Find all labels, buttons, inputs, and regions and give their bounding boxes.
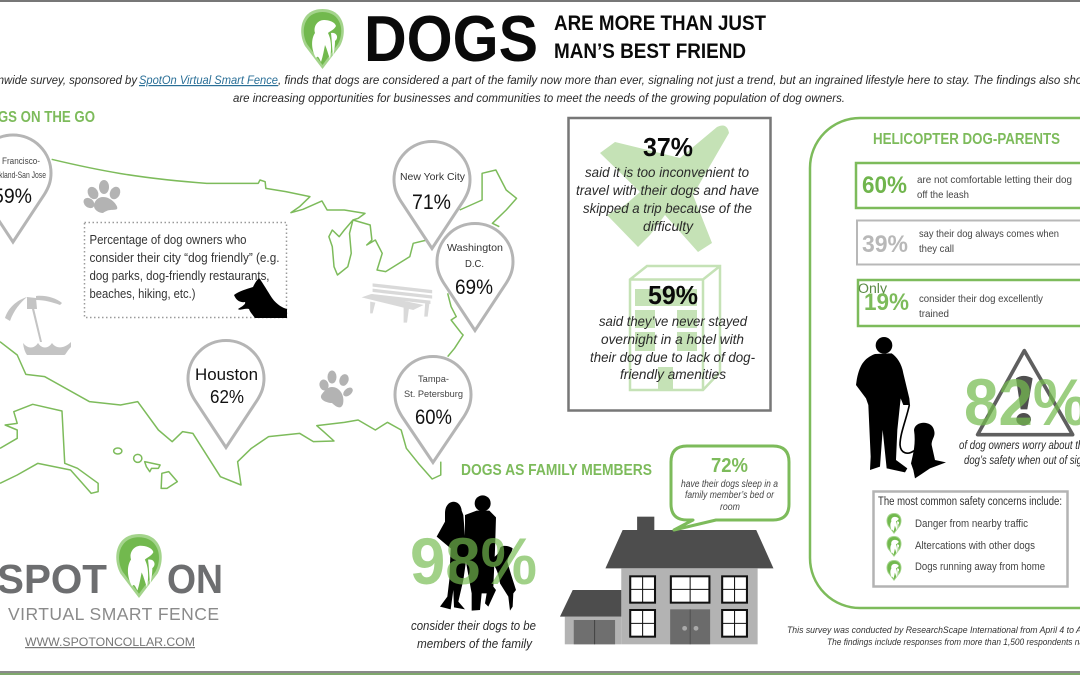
stat box: only 19 percent: 19% <box>864 289 909 316</box>
stat box: only 19 percent: consider their dog excellently <box>919 293 1044 305</box>
callout: percentage of dog owners: beaches, hiking, etc.) <box>90 287 196 301</box>
stat box: 60 percent: off the leash <box>917 189 969 201</box>
icon: warning triangle <box>978 351 1073 435</box>
panel: travel stats: said they’ve never stayed <box>599 313 748 329</box>
US map outline <box>0 159 517 493</box>
pin: Houston: Houston <box>195 366 258 384</box>
subtitle: ARE MORE THAN JUST <box>554 12 766 35</box>
stat box: 60 percent: 60% <box>862 172 907 199</box>
stat box: 60 percent <box>856 163 1080 208</box>
pin: New York City: 71% <box>412 191 451 214</box>
pin: Washington D.C.: 69% <box>455 276 493 299</box>
box: safety concerns: Danger from nearby traffic <box>915 518 1028 530</box>
pin: Houston <box>188 340 264 448</box>
footnote <box>787 625 1080 648</box>
stat box: only 19 percent: Only <box>858 281 887 296</box>
logo: SpotOn virtual smart fence: SPOT <box>0 556 107 602</box>
pin: Tampa-St. Petersburg <box>395 356 471 462</box>
stat: 98 percent with family silhouette: consider their dogs to be <box>411 619 536 633</box>
box: safety concerns: Altercations with other dogs <box>915 540 1035 552</box>
illustration: house <box>560 517 773 644</box>
bottom rule <box>0 671 1080 675</box>
heading: dogs as family members: DOGS AS FAMILY MEMBERS <box>461 462 652 479</box>
stat box: only 19 percent <box>858 280 1080 326</box>
panel: helicopter dog-parents <box>810 118 1080 608</box>
stat box: 39 percent: 39% <box>862 231 908 258</box>
pin: San Francisco: Francisco- <box>2 156 40 167</box>
logo: SpotOn virtual smart fence: WWW.SPOTONCOLLAR.COM <box>25 635 195 649</box>
callout: percentage of dog owners: dog parks, dog-friendly restaurants, <box>90 269 270 283</box>
callout: percentage of dog owners: Percentage of dog owners who <box>90 233 247 247</box>
stat box: 39 percent <box>857 220 1080 264</box>
box: safety concerns: Dogs running away from home <box>915 561 1045 573</box>
box: safety concerns <box>874 492 1068 586</box>
pin: New York City <box>394 142 470 248</box>
callout: percentage of dog owners <box>84 222 287 318</box>
pin: Washington D.C.: Washington <box>447 242 503 254</box>
pin: Washington D.C.: D.C. <box>465 258 484 270</box>
panel: travel stats: overnight in a hotel with <box>601 331 744 347</box>
pin: Washington D.C. <box>437 224 513 330</box>
callout: 72 percent speech bubble: room <box>720 502 740 513</box>
panel: travel stats: their dog due to lack of dog- <box>590 349 755 365</box>
panel: travel stats: 37% <box>643 132 693 162</box>
title: DOGS: DOGS <box>364 2 538 75</box>
stat: 82 percent with warning triangle <box>959 351 1080 467</box>
panel: travel stats <box>568 118 770 410</box>
callout: 72 percent speech bubble: have their dogs sleep in a <box>681 479 778 490</box>
callout: 72 percent speech bubble: 72% <box>711 455 748 477</box>
intro paragraph: SpotOn Virtual Smart Fence <box>139 73 278 87</box>
icon: family silhouette <box>437 495 516 611</box>
logo: SpotOn virtual smart fence: ON <box>167 556 223 602</box>
pin: Houston: 62% <box>210 386 244 407</box>
icon: airplane <box>600 125 729 252</box>
pin: Tampa-St. Petersburg: St. Petersburg <box>404 389 463 400</box>
stat: 98 percent with family silhouette <box>410 495 537 651</box>
panel: travel stats: travel with their dogs and have <box>576 182 759 198</box>
icon: hotel <box>630 266 720 391</box>
pin: San Francisco <box>0 135 51 242</box>
pin: Tampa-St. Petersburg: Tampa- <box>418 374 449 385</box>
callout: 72 percent speech bubble: family member’s bed or <box>685 490 775 501</box>
pin: New York City: New York City <box>400 171 466 183</box>
panel: travel stats: difficulty <box>643 218 694 234</box>
top rule <box>0 0 1080 2</box>
pin: Tampa-St. Petersburg: 60% <box>415 406 452 429</box>
icon: beach umbrella <box>5 296 71 355</box>
icon: paw <box>82 180 122 213</box>
callout: 72 percent speech bubble <box>671 446 789 530</box>
icon: dog head silhouette <box>234 278 287 318</box>
icon: paw <box>318 370 354 407</box>
stat box: 39 percent: say their dog always comes when <box>919 228 1059 240</box>
intro paragraph <box>0 73 1080 105</box>
icon: bench <box>362 283 432 323</box>
panel: travel stats: said it is too inconvenient to <box>585 164 749 180</box>
subtitle <box>554 12 766 63</box>
logo: SpotOn virtual smart fence: VIRTUAL SMART FENCE <box>8 604 219 624</box>
stat: 98 percent with family silhouette: members of the family <box>417 637 533 651</box>
stat box: 39 percent: they call <box>919 243 954 255</box>
panel: travel stats: skipped a trip because of the <box>583 200 752 216</box>
stat: 98 percent with family silhouette: 98% <box>410 524 537 598</box>
panel: travel stats: friendly amenities <box>620 366 726 382</box>
subtitle: MAN’S BEST FRIEND <box>554 40 746 63</box>
intro paragraph: are increasing opportunities for businesses and communities to meet the needs of the growing population of dog owners. <box>233 91 845 105</box>
callout: percentage of dog owners: consider their city “dog friendly” (e.g. <box>90 251 280 265</box>
stat box: only 19 percent: trained <box>919 308 949 320</box>
panel: travel stats: 59% <box>648 280 698 310</box>
icon: man walking dog silhouette <box>856 337 946 478</box>
stat box: 60 percent: are not comfortable letting their dog <box>917 174 1072 186</box>
logo: SpotOn virtual smart fence <box>0 534 223 649</box>
header logo pin <box>301 9 344 69</box>
